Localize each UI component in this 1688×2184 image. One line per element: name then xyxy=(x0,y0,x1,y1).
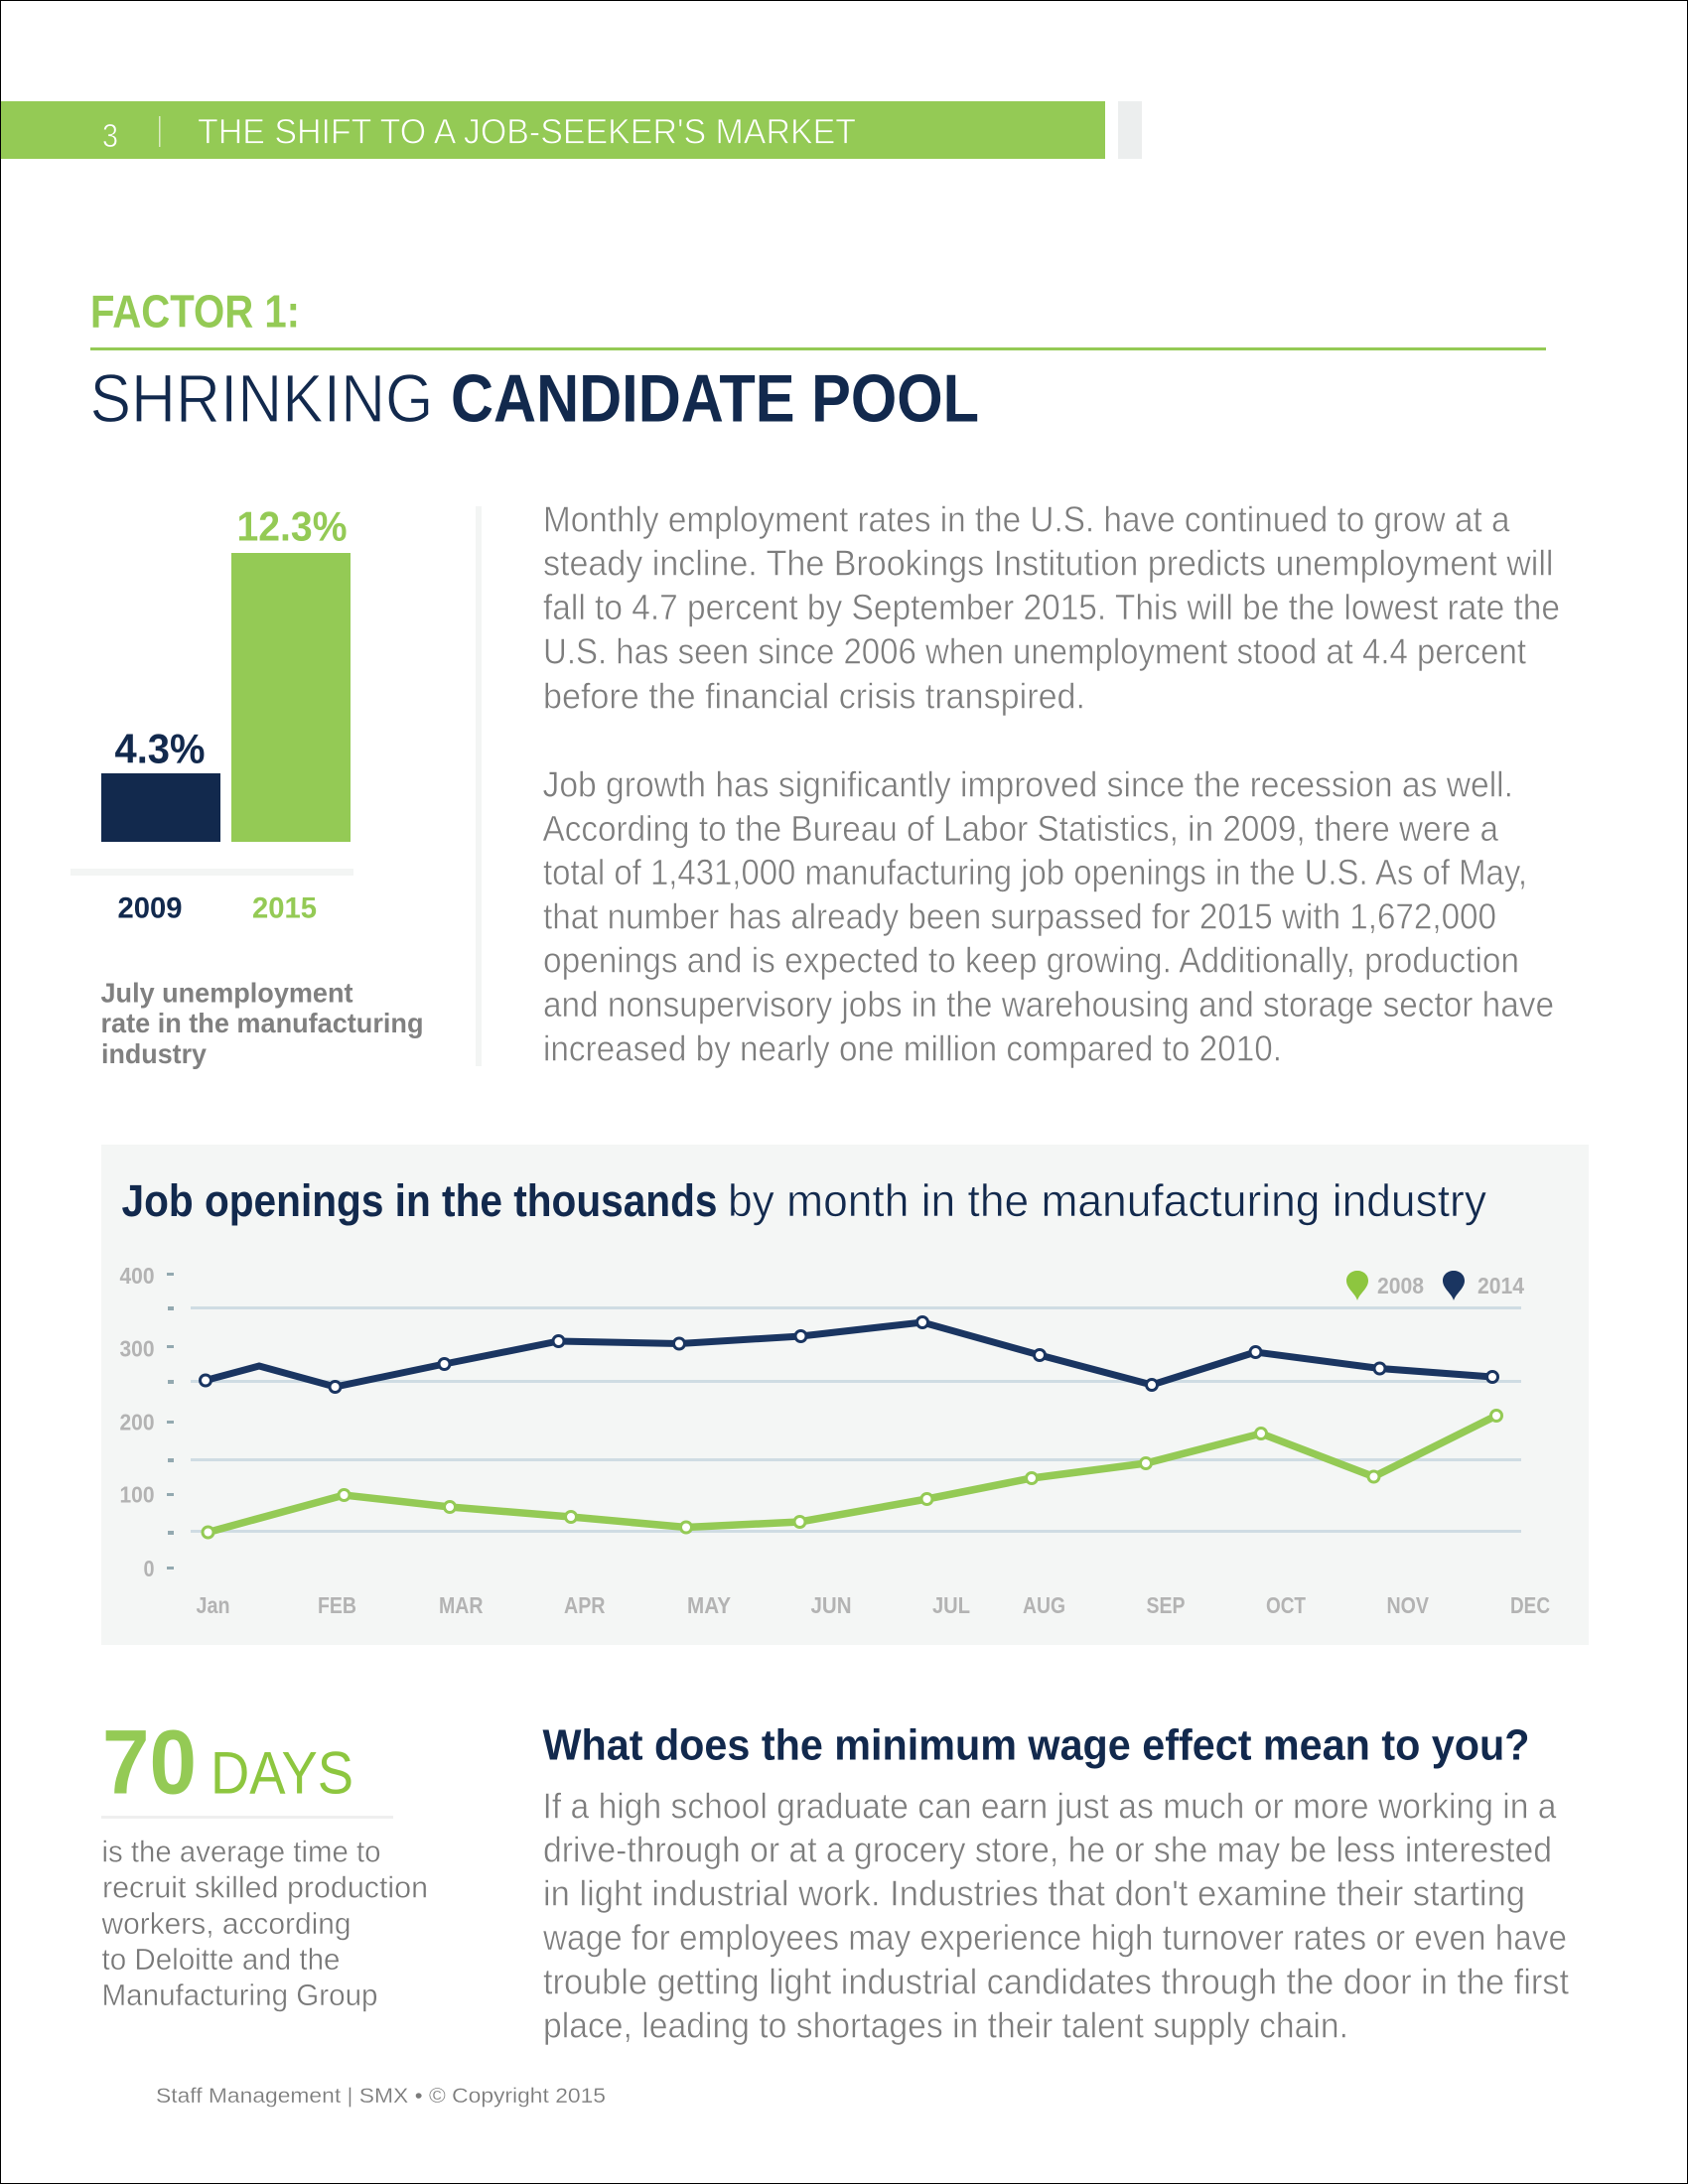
bar 2015 xyxy=(231,502,351,925)
y axis labels: 200 xyxy=(119,1410,155,1435)
callout: 70 days: 70 xyxy=(102,1711,197,1813)
callout: 70 days: is the average time to xyxy=(101,1835,381,1869)
paragraph: job growth xyxy=(542,764,1554,1068)
section heading: FACTOR 1: xyxy=(90,286,300,338)
paragraph: employment rates xyxy=(543,498,1560,717)
panel: job openings line chart xyxy=(101,1145,1589,1645)
bar chart: July unemployment rate xyxy=(70,502,353,925)
bar chart caption: industry xyxy=(101,1038,207,1069)
legend xyxy=(1346,1271,1524,1300)
line series 2014 xyxy=(201,1316,1497,1392)
chart title xyxy=(121,1175,1486,1226)
minimum wage paragraph: in light industrial work. Industries that don't examine their starting xyxy=(543,1873,1525,1914)
callout: 70 days: Manufacturing Group xyxy=(101,1978,377,2012)
chart title: Job openings in the thousands xyxy=(121,1175,717,1226)
bar chart caption: rate in the manufacturing xyxy=(101,1008,423,1038)
x axis labels: AUG xyxy=(1023,1592,1065,1618)
bar 2015: 12.3% xyxy=(236,502,348,550)
x axis labels xyxy=(197,1592,1550,1618)
section heading: CANDIDATE POOL xyxy=(451,361,979,437)
callout: 70 days: workers, according xyxy=(101,1906,352,1941)
x axis labels: MAR xyxy=(439,1592,484,1618)
minimum wage section xyxy=(542,1721,1569,2045)
x axis labels: Jan xyxy=(197,1592,230,1618)
bar 2009: 2009 xyxy=(117,891,183,925)
y axis labels: 0 xyxy=(143,1556,155,1581)
minimum wage paragraph: If a high school graduate can earn just as much or more working in a xyxy=(542,1786,1557,1827)
minimum wage paragraph: trouble getting light industrial candidates through the door in the first xyxy=(543,1961,1569,2001)
line series 2008 xyxy=(203,1410,1501,1538)
x axis labels: JUN xyxy=(810,1592,852,1618)
gridlines and ticks xyxy=(167,1273,1521,1570)
paragraph: employment rates: U.S. has seen since 2006 when unemployment stood at 4.4 percent xyxy=(543,631,1526,671)
bar 2009 xyxy=(101,725,220,925)
x axis labels: APR xyxy=(564,1592,606,1618)
callout: 70 days: recruit skilled production xyxy=(102,1870,428,1905)
minimum wage paragraph: place, leading to shortages in their talent supply chain. xyxy=(543,2005,1348,2045)
paragraph: job growth: openings and is expected to keep growing. Additionally, production xyxy=(543,939,1519,981)
y axis labels xyxy=(119,1263,155,1581)
bar chart caption: July unemployment xyxy=(101,977,353,1009)
bar 2009: 4.3% xyxy=(115,725,205,772)
header band: 3 xyxy=(102,117,118,154)
minimum wage paragraph: drive-through or at a grocery store, he or she may be less interested xyxy=(543,1829,1552,1870)
chart title: by month in the manufacturing industry xyxy=(728,1175,1486,1226)
x axis labels: FEB xyxy=(318,1592,356,1618)
paragraph: job growth: that number has already been surpassed for 2015 with 1,672,000 xyxy=(543,895,1496,936)
header band: THE SHIFT TO A JOB-SEEKER'S MARKET xyxy=(198,113,856,151)
bar chart caption xyxy=(101,977,423,1069)
x axis labels: OCT xyxy=(1266,1592,1306,1618)
paragraph: job growth: Job growth has significantly improved since the recession as well. xyxy=(542,764,1513,805)
bar 2015: 2015 xyxy=(252,891,317,925)
x axis labels: NOV xyxy=(1386,1592,1430,1618)
x axis labels: JUL xyxy=(932,1592,970,1618)
footer: Staff Management | SMX • © Copyright 2015 xyxy=(156,2085,606,2108)
section heading: SHRINKING xyxy=(89,360,433,437)
callout: 70 days xyxy=(101,1711,428,2012)
minimum wage paragraph: wage for employees may experience high turnover rates or even have xyxy=(542,1917,1567,1958)
paragraph: job growth: According to the Bureau of Labor Statistics, in 2009, there were a xyxy=(542,808,1499,849)
paragraph: employment rates: fall to 4.7 percent by September 2015. This will be the lowest rate the xyxy=(543,587,1560,627)
paragraph: employment rates: before the financial crisis transpired. xyxy=(543,675,1085,717)
x axis labels: MAY xyxy=(687,1592,731,1618)
minimum wage heading: What does the minimum wage effect mean to you? xyxy=(542,1721,1529,1769)
y axis labels: 100 xyxy=(119,1481,155,1507)
y axis labels: 400 xyxy=(119,1263,155,1289)
paragraph: job growth: and nonsupervisory jobs in the warehousing and storage sector have xyxy=(543,984,1554,1024)
x axis labels: SEP xyxy=(1146,1592,1186,1618)
y axis labels: 300 xyxy=(119,1336,155,1362)
paragraph: employment rates: steady incline. The Brookings Institution predicts unemployment will xyxy=(543,543,1553,584)
minimum wage paragraph xyxy=(542,1786,1569,2045)
callout: 70 days: to Deloitte and the xyxy=(101,1942,340,1977)
section heading xyxy=(89,286,1546,437)
legend: 2014 xyxy=(1477,1273,1524,1298)
callout: 70 days: DAYS xyxy=(211,1739,353,1807)
legend: 2008 xyxy=(1377,1273,1424,1298)
x axis labels: DEC xyxy=(1510,1592,1550,1618)
header band xyxy=(0,101,1142,159)
paragraph: job growth: increased by nearly one million compared to 2010. xyxy=(543,1028,1282,1068)
paragraph: employment rates: Monthly employment rates in the U.S. have continued to grow at a xyxy=(543,498,1510,540)
paragraph: job growth: total of 1,431,000 manufacturing job openings in the U.S. As of May, xyxy=(543,852,1527,892)
